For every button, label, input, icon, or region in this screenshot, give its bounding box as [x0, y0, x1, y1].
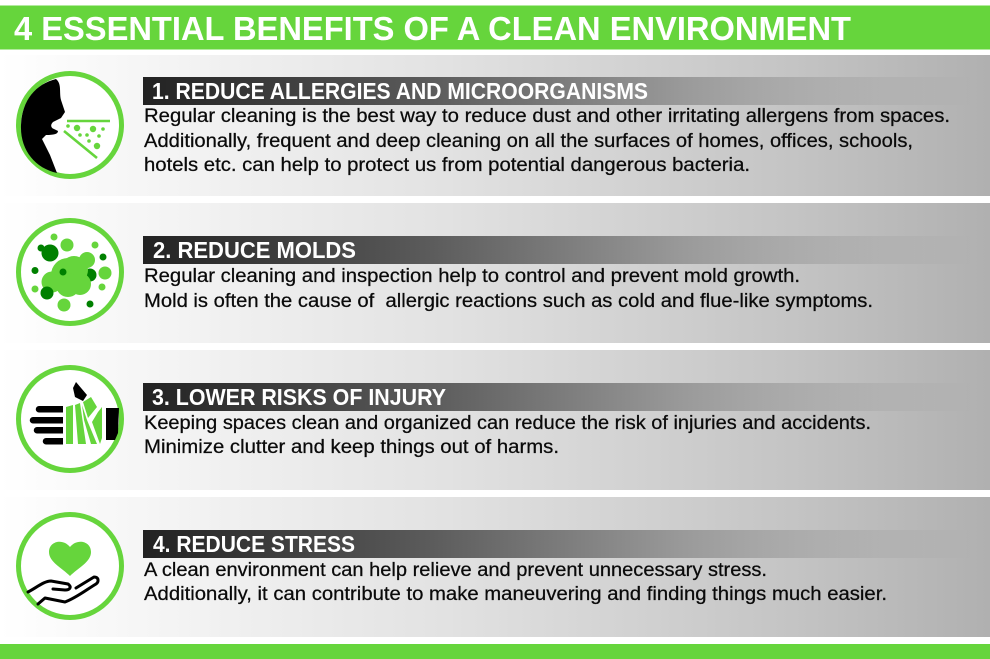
- body text: hotels etc. can help to protect us from potential dangerous bacteria.: [144, 155, 750, 176]
- body text: Regular cleaning is the best way to reduce dust and other irritating allergens from spaces.: [144, 106, 950, 127]
- body text: Additionally, frequent and deep cleaning on all the surfaces of homes, offices, schools,: [144, 131, 913, 152]
- title banner: 4 ESSENTIAL BENEFITS OF A CLEAN ENVIRONMENT: [14, 10, 851, 47]
- body text: Additionally, it can contribute to make maneuvering and finding things much easier.: [144, 584, 887, 605]
- body text: Mold is often the cause of allergic reactions such as cold and flue-like symptoms.: [144, 291, 873, 312]
- panel: reduce stress: [0, 497, 990, 637]
- icon: person breathing particles: [18, 74, 122, 176]
- heading bar: 4. REDUCE STRESS: [153, 531, 355, 557]
- heading bar: [143, 236, 970, 264]
- body text: [144, 560, 887, 605]
- icon: mold: [18, 220, 122, 324]
- body text: [144, 266, 873, 312]
- body text: A clean environment can help relieve and prevent unnecessary stress.: [144, 560, 767, 581]
- panel: lower risks of injury: [0, 350, 990, 490]
- body text: Minimize clutter and keep things out of harms.: [144, 437, 559, 458]
- heading bar: [143, 530, 970, 558]
- panel: reduce allergies: [0, 55, 990, 196]
- heading bar: [143, 383, 970, 411]
- body text: Keeping spaces clean and organized can reduce the risk of injuries and accidents.: [144, 413, 871, 434]
- body text: [144, 106, 950, 176]
- icon: bandaged hand: [18, 368, 122, 470]
- heading bar: 3. LOWER RISKS OF INJURY: [152, 384, 446, 410]
- footer bar: [0, 644, 990, 659]
- heading bar: [143, 77, 970, 105]
- body text: [144, 413, 871, 458]
- heading bar: 2. REDUCE MOLDS: [153, 237, 356, 263]
- body text: Regular cleaning and inspection help to control and prevent mold growth.: [144, 266, 800, 287]
- panel: reduce molds: [0, 203, 990, 343]
- heading bar: 1. REDUCE ALLERGIES AND MICROORGANISMS: [152, 78, 648, 104]
- icon: hand holding heart: [18, 514, 122, 618]
